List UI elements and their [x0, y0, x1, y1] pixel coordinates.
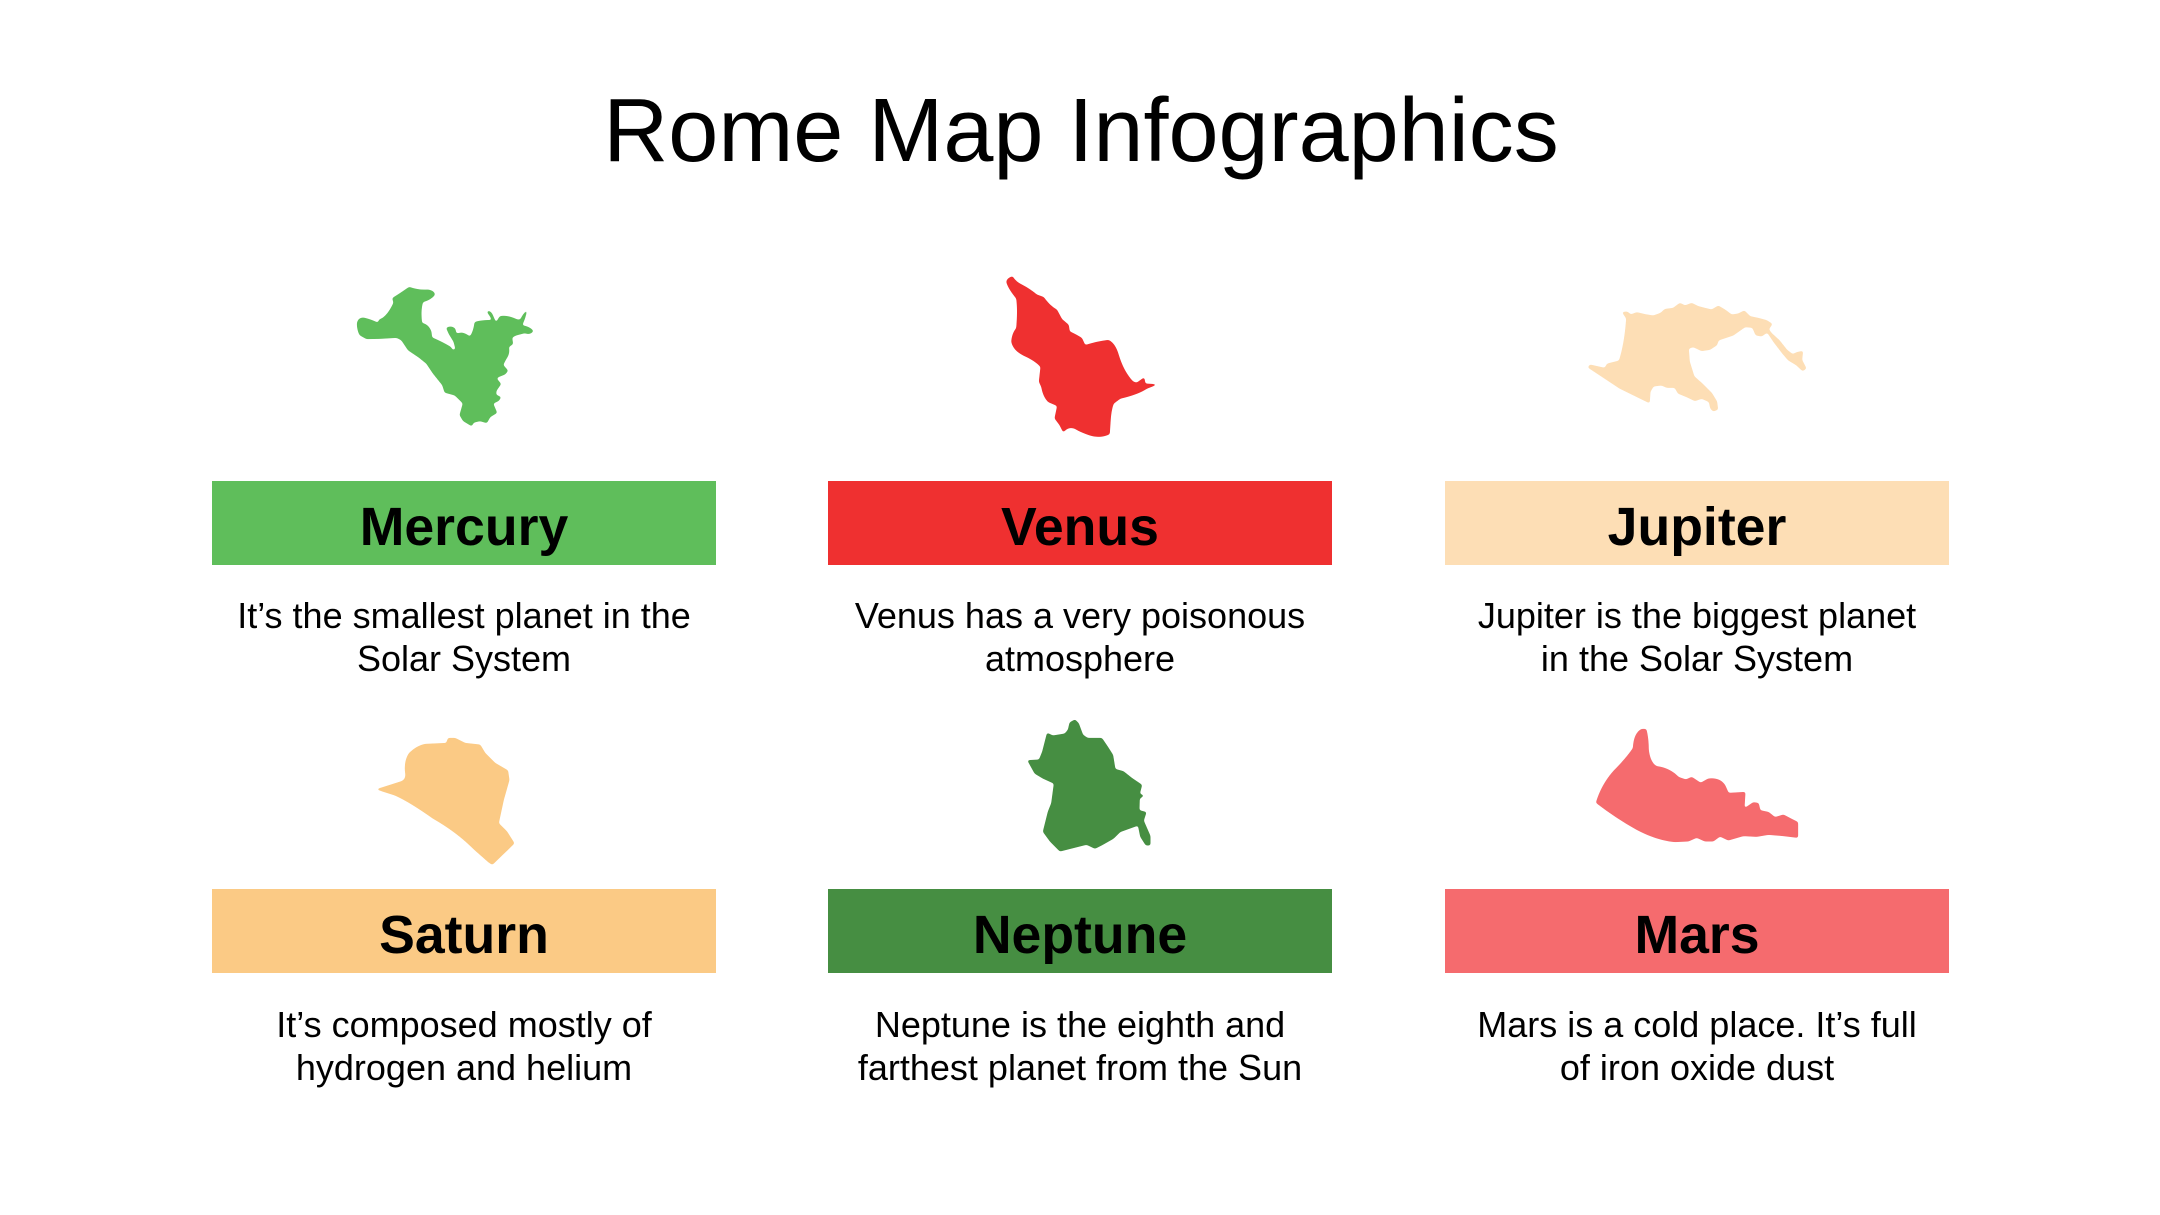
bar: Mercury — [212, 481, 716, 565]
bar: Jupiter: Jupiter — [1608, 497, 1786, 557]
text: Neptune description: farthest planet from the Sun — [858, 1047, 1302, 1088]
text: Saturn description: hydrogen and helium — [296, 1047, 632, 1088]
text: Mars description: Mars is a cold place. It’s full — [1477, 1004, 1917, 1045]
bar: Jupiter — [1445, 481, 1949, 565]
text: Mercury description: Solar System — [357, 638, 571, 679]
icon: Venus map shape — [1007, 277, 1156, 436]
bar: Mercury: Mercury — [360, 497, 568, 557]
text: Jupiter description: Jupiter is the biggest planet — [1478, 595, 1916, 636]
text: Mercury description: It’s the smallest planet in the — [237, 595, 691, 636]
text: Mars description: of iron oxide dust — [1560, 1047, 1834, 1088]
text: Venus description: Venus has a very poisonous — [855, 595, 1305, 636]
icon: Mercury map shape — [357, 287, 533, 426]
text: Mars description — [1477, 1004, 1917, 1088]
text: Saturn description — [276, 1004, 652, 1088]
bar: Neptune: Neptune — [973, 905, 1187, 965]
text: Saturn description: It’s composed mostly of — [276, 1004, 652, 1045]
bar: Mars — [1445, 889, 1949, 973]
icon: Saturn map shape — [377, 738, 514, 864]
bar: Saturn: Saturn — [379, 905, 549, 965]
bar: Venus: Venus — [1001, 497, 1159, 557]
icon: Mars map shape — [1596, 729, 1798, 842]
text: Mercury description — [237, 595, 691, 679]
bar: Venus — [828, 481, 1332, 565]
text: Neptune description — [858, 1004, 1302, 1088]
title: Rome Map Infographics — [603, 81, 1559, 181]
bar: Mars: Mars — [1634, 905, 1760, 965]
bar: Saturn — [212, 889, 716, 973]
text: Venus description — [855, 595, 1305, 679]
text: Jupiter description — [1478, 595, 1916, 679]
bar: Neptune — [828, 889, 1332, 973]
text: Neptune description: Neptune is the eighth and — [875, 1004, 1285, 1045]
icon: Neptune map shape — [1028, 720, 1150, 851]
icon: Jupiter map shape — [1588, 303, 1806, 411]
text: Venus description: atmosphere — [985, 638, 1175, 679]
text: Jupiter description: in the Solar System — [1541, 638, 1853, 679]
